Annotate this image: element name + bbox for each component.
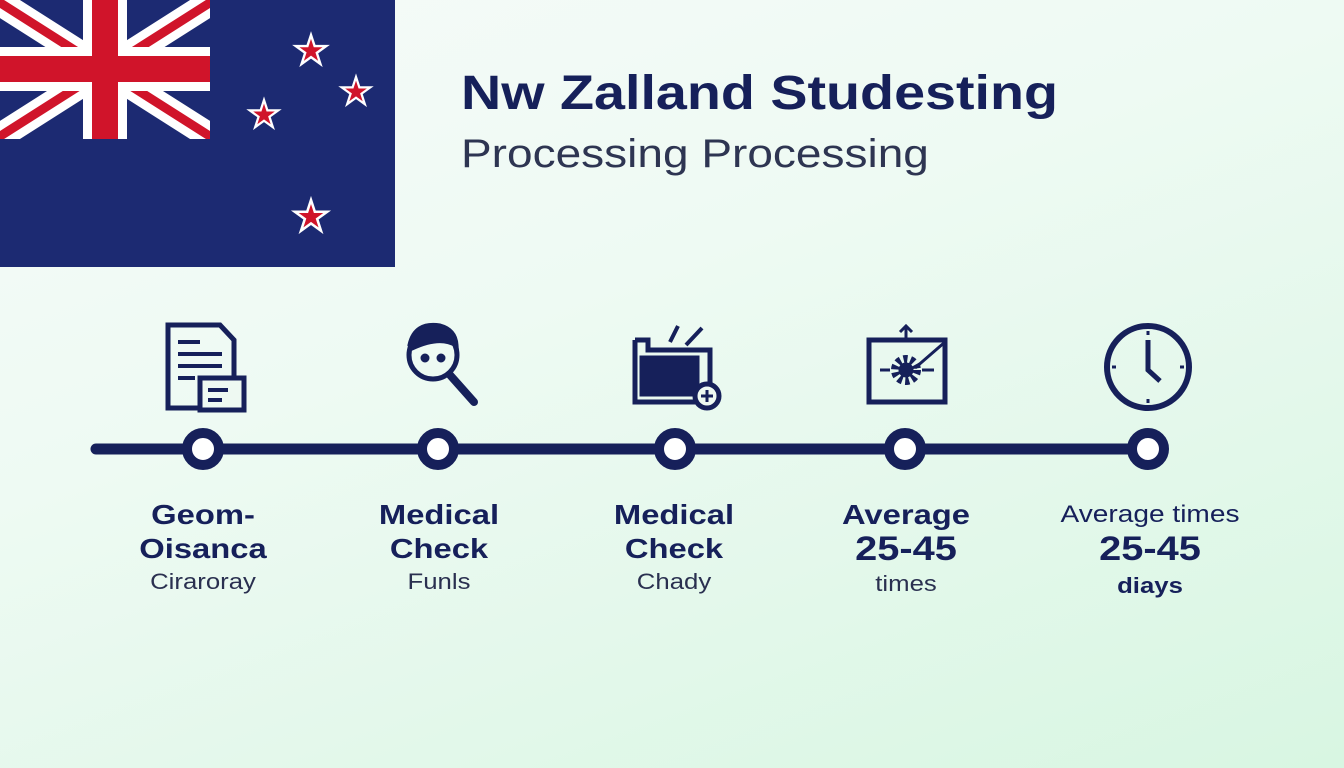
icon: document [168, 325, 244, 410]
step 2: Check [390, 533, 488, 564]
icon: gear board [869, 326, 945, 402]
step 4: Average [842, 499, 970, 530]
step 3: Medical [614, 499, 734, 530]
icon: face magnifier [409, 325, 474, 402]
flag [0, 0, 395, 267]
step 3: Check [625, 533, 723, 564]
step 5: Average times [1061, 501, 1239, 528]
step 3: Chady [637, 569, 711, 594]
step 3 [614, 499, 734, 594]
step 1: Ciraroray [150, 569, 256, 594]
step 1: Oisanca [139, 533, 267, 564]
icon: folder plus [635, 326, 719, 408]
timeline [90, 322, 1192, 470]
step 5: 25-45 [1099, 530, 1201, 568]
step 2 [379, 499, 499, 594]
step 4: 25-45 [855, 530, 957, 568]
title: Nw Zalland Studesting [461, 67, 1058, 120]
step 5 [1060, 501, 1239, 598]
step 5: diays [1117, 573, 1183, 598]
step 4: times [875, 571, 937, 596]
icon: clock [1107, 326, 1189, 408]
step 2: Medical [379, 499, 499, 530]
step 1: Geom- [151, 499, 255, 530]
step 2: Funls [408, 569, 470, 594]
subtitle: Processing Processing [461, 132, 929, 176]
step 1 [139, 499, 267, 594]
step 4 [842, 499, 970, 596]
